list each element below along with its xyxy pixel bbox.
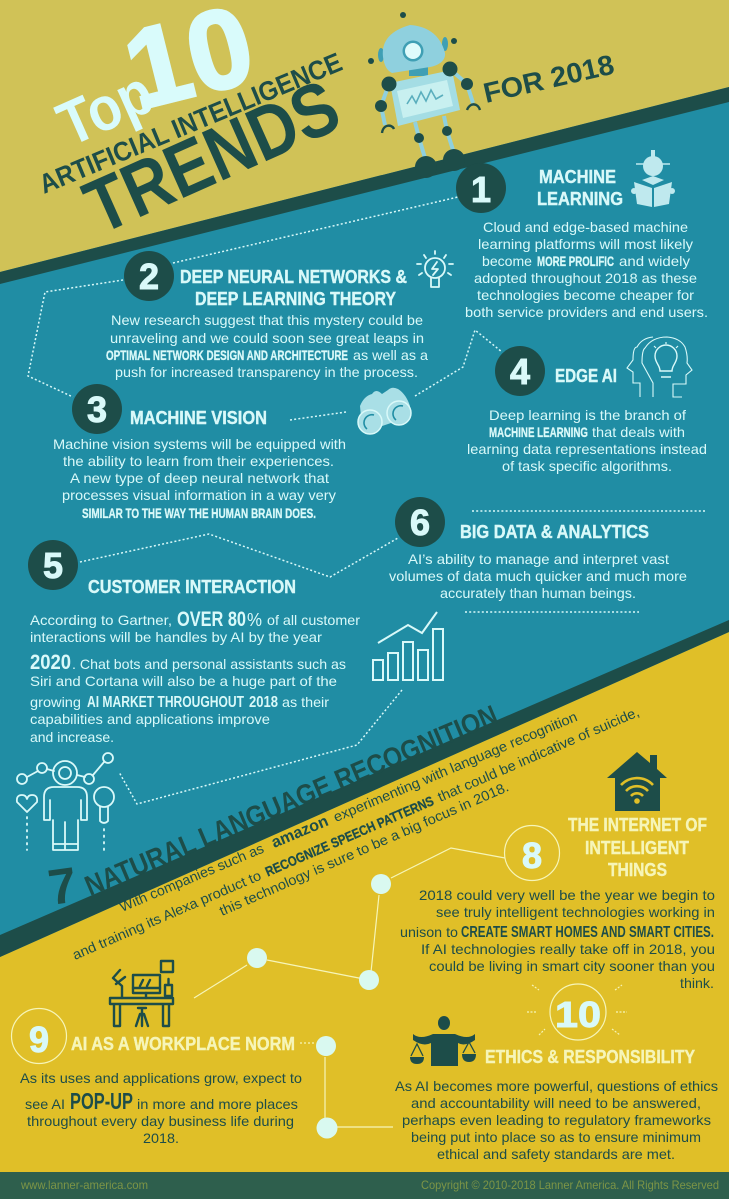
text block 7: this technology is sure to be a big focus in 2018. (217, 778, 511, 919)
text block 5: OVER 80 (177, 608, 246, 631)
icon: smart home wifi (607, 752, 667, 811)
text block 9: POP-UP (70, 1088, 133, 1114)
text block 7: amazon (269, 813, 331, 852)
number badge 6 (395, 497, 445, 547)
text block 9: see AI (25, 1096, 65, 1112)
heading: deep neural networks (180, 267, 407, 309)
footer (0, 1172, 729, 1199)
text block 2: push for increased transparency in the process. (115, 364, 418, 380)
text block 8: 2018 could very well be the year we begin to (419, 887, 715, 903)
section 2: deep neural networks (106, 251, 453, 380)
text block 6 (389, 551, 687, 601)
text block 10: perhaps even leading to regulatory frameworks (402, 1112, 711, 1128)
icon: person with scales (410, 1016, 476, 1066)
text block 4: learning data representations instead (467, 441, 707, 457)
text block 2: as well as a (353, 347, 428, 363)
number badge 10 (527, 984, 627, 1040)
section 8: internet of intelligent things (400, 752, 715, 991)
text block 8: could be living in smart city sooner than you (429, 958, 715, 974)
text block 5: growing (30, 694, 81, 710)
heading: AI as a workplace norm: AI AS A WORKPLACE NORM (71, 1034, 295, 1054)
text block 9: 2018. (143, 1130, 179, 1146)
text block 3: the ability to learn from their experiences. (63, 453, 334, 469)
icon: light bulb (417, 251, 453, 287)
text block 9: As its uses and applications grow, expect to (20, 1070, 302, 1086)
text block 10: and accountability will need to be answered, (411, 1095, 701, 1111)
text block 1: technologies become cheaper for (477, 287, 694, 303)
section 7: natural language recognition (45, 699, 642, 963)
text block 4: that deals with (592, 424, 685, 440)
text block 5: Siri and Cortana will also be a huge part of the (30, 673, 337, 689)
title: FOR 2018 (480, 49, 617, 109)
text block 7: RECOGNIZE SPEECH PATTERNS (263, 793, 436, 879)
text block 5: AI MARKET THROUGHOUT (87, 694, 244, 711)
number badge 3: 3 (87, 389, 107, 430)
text block 2 (106, 312, 428, 380)
text block 6: AI’s ability to manage and interpret vast (408, 551, 669, 567)
text block 5: and increase. (30, 729, 114, 745)
number badge 3 (72, 384, 122, 434)
text block 5: . Chat bots and personal assistants such as (72, 656, 346, 672)
section 5: customer interaction (17, 540, 443, 850)
text block 10 (395, 1078, 718, 1162)
text block 1: and widely (619, 253, 690, 269)
text block 6: volumes of data much quicker and much more (389, 568, 687, 584)
text block 5: interactions will be handles by AI by the year (30, 629, 322, 645)
text block 4: MACHINE LEARNING (489, 425, 588, 440)
text block 5 (30, 608, 360, 745)
icon: binoculars (358, 388, 411, 434)
text block 8: see truly intelligent technologies working in (436, 904, 715, 920)
text block 3: processes visual information in a way very (62, 487, 336, 503)
panel: bottom yellow background (0, 632, 729, 1172)
text block 5: 2018 (249, 694, 278, 711)
text block 5: as their (282, 694, 329, 710)
text block 4 (467, 407, 707, 474)
number badge 10: 10 (555, 994, 601, 1035)
text block 8: If AI technologies really take off in 2018, you (421, 941, 715, 957)
text block 3 (53, 436, 346, 521)
text block 1 (465, 219, 708, 320)
heading: machine learning (537, 167, 623, 209)
text block 2: New research suggest that this mystery could be (111, 312, 423, 328)
text block 4: of task specific algorithms. (502, 458, 672, 474)
number badge 9: 9 (29, 1019, 49, 1060)
number badge 4 (495, 346, 545, 396)
text block 1: Cloud and edge-based machine (483, 219, 688, 235)
text block 1: MORE PROLIFIC (537, 254, 614, 269)
text block 3: A new type of deep neural network that (70, 470, 329, 486)
text block 9: throughout every day business life during (27, 1113, 294, 1129)
number badge 2: 2 (139, 256, 159, 297)
text block 5: % (247, 610, 262, 630)
heading: machine learning: MACHINE (539, 167, 616, 187)
heading: natural language recognition: NATURAL LANGUAGE RECOGNITION (80, 699, 502, 902)
text block 2: OPTIMAL NETWORK DESIGN AND ARCHITECTURE (106, 348, 348, 363)
heading: natural language recognition: 7 (45, 857, 80, 916)
number badge 1 (456, 163, 506, 213)
footer: www.lanner-america.com (20, 1178, 148, 1192)
section 1: machine learning (456, 150, 708, 320)
text block 10: being put into place so as to ensure minimum (411, 1129, 701, 1145)
text block 5: capabilities and applications improve (30, 711, 270, 727)
icon: bar chart with trend line (373, 612, 443, 680)
heading: machine learning: LEARNING (537, 189, 623, 209)
number badge 9 (12, 1008, 66, 1064)
number badge 6: 6 (410, 502, 430, 543)
connector lines: dotted paths in teal panel (28, 197, 707, 804)
heading: internet of intelligent things: THE INTERNET OF (568, 815, 707, 835)
text block 9: in more and more places (137, 1096, 298, 1112)
section 9: AI as a workplace norm (12, 961, 302, 1146)
icon: heads with light bulb (627, 337, 692, 397)
text block 8: unison to (400, 924, 458, 940)
icon: person with data nodes (17, 753, 114, 850)
text block 1: adopted throughout 2018 as these (474, 270, 697, 286)
heading: internet of intelligent things: THINGS (608, 860, 667, 880)
title: Top (48, 58, 163, 160)
number badge 5 (28, 540, 78, 590)
number badge 5: 5 (43, 545, 63, 586)
text block 8 (400, 887, 715, 991)
connector lines: yellow panel (194, 848, 505, 1138)
text block 5: 2020 (30, 651, 71, 674)
text block 7: experimenting with language recognition (331, 708, 579, 825)
section 4: edge AI (467, 337, 707, 474)
heading: deep neural networks: DEEP LEARNING THEORY (195, 289, 396, 309)
number badge 8: 8 (522, 835, 542, 876)
diagonal band: header edge (0, 87, 729, 284)
heading: internet of intelligent things: INTELLIGENT (585, 838, 689, 858)
section 3: machine vision (53, 384, 411, 521)
title (35, 0, 617, 251)
text block 10: As AI becomes more powerful, questions of ethics (395, 1078, 718, 1094)
text block 7: With companies such as (117, 840, 266, 915)
icon: robot reading book (631, 150, 675, 207)
icon: robot (368, 12, 480, 178)
text block 9 (20, 1070, 302, 1146)
title: ARTIFICIAL INTELLIGENCE (35, 47, 346, 200)
heading: deep neural networks: DEEP NEURAL NETWORKS & (180, 267, 407, 287)
panel: header background (0, 0, 729, 272)
heading: ethics and responsibility: ETHICS & RESPONSIBILITY (485, 1047, 695, 1067)
text block 7: that could be indicative of suicide, (435, 703, 642, 805)
text block 1: both service providers and end users. (465, 304, 708, 320)
text block 3: SIMILAR TO THE WAY THE HUMAN BRAIN DOES. (82, 506, 316, 521)
text block 5: According to Gartner, (30, 612, 172, 628)
heading: edge AI: EDGE AI (555, 366, 617, 386)
text block 6: accurately than human beings. (440, 585, 636, 601)
text block 1: become (482, 253, 532, 269)
section 6: big data (389, 497, 687, 601)
icon: desk with computer (110, 961, 173, 1026)
text block 5: of all customer (267, 612, 360, 628)
heading: machine vision: MACHINE VISION (130, 408, 267, 428)
text block 8: think. (680, 975, 714, 991)
text block 3: Machine vision systems will be equipped with (53, 436, 346, 452)
text block 7: and training its Alexa product to (70, 867, 264, 963)
title: TRENDS (72, 64, 352, 251)
heading: internet of intelligent things (568, 815, 707, 880)
heading: big data: BIG DATA & ANALYTICS (460, 522, 649, 542)
number badge 1: 1 (471, 169, 491, 210)
number badge 2 (124, 251, 174, 301)
text block 10: ethical and safety standards are met. (437, 1146, 675, 1162)
text block 7 (70, 703, 642, 963)
text block 1: learning platforms will most likely (478, 236, 693, 252)
number badge 8 (504, 826, 560, 880)
diagonal band: lower edge (0, 620, 729, 957)
text block 4: Deep learning is the branch of (489, 407, 686, 423)
heading: customer interaction: CUSTOMER INTERACTION (88, 577, 296, 597)
section 10: ethics and responsibility (395, 984, 718, 1162)
number badge 4: 4 (510, 351, 530, 392)
text block 2: unraveling and we could soon see great leaps in (110, 330, 424, 346)
